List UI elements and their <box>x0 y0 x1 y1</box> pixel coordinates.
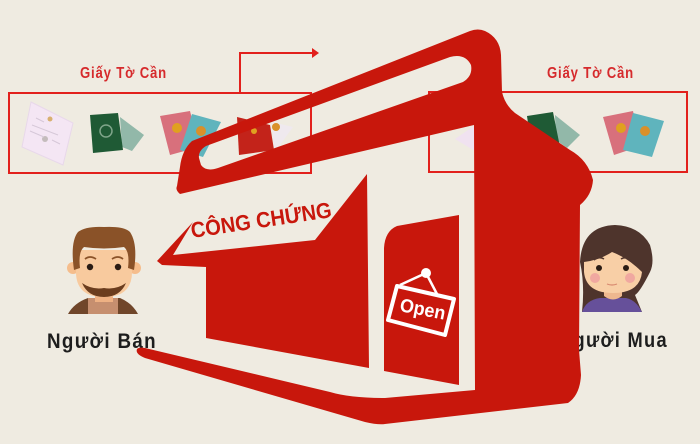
eyes <box>87 264 121 270</box>
neck <box>95 285 113 302</box>
document: red certificate and white card <box>237 117 293 155</box>
icon: open sign <box>388 268 454 335</box>
person: buyer avatar <box>580 225 652 312</box>
shop: door <box>384 215 459 385</box>
eyes <box>596 265 629 271</box>
document: household books <box>160 111 221 157</box>
shop: basket-shaped frame <box>137 30 593 424</box>
document: household books <box>603 111 664 157</box>
ears <box>67 262 141 274</box>
icon: open sign: Open <box>398 295 447 325</box>
eyebrows <box>594 258 632 260</box>
eyebrows <box>85 257 123 259</box>
person: seller avatar <box>67 227 141 314</box>
label: buyer: Người Mua <box>559 329 668 352</box>
shoulders <box>582 298 642 312</box>
cheeks <box>590 273 635 283</box>
heading: right documents: Giấy Tờ Cần <box>547 65 634 82</box>
panel: buyer documents <box>429 92 687 172</box>
beard <box>82 283 126 297</box>
document: certificate <box>455 126 500 160</box>
document: passport and card <box>90 113 144 153</box>
panel: seller documents <box>9 93 311 173</box>
heading: left documents: Giấy Tờ Cần <box>80 65 167 82</box>
shop: awning and front wall <box>157 174 369 368</box>
document: certificate <box>22 102 73 165</box>
hair <box>73 227 135 270</box>
sign: shop name: CÔNG CHỨNG <box>189 197 333 243</box>
document: passport and card <box>527 112 580 152</box>
shoulders <box>68 298 138 314</box>
face <box>76 250 132 297</box>
neck <box>604 285 622 300</box>
mouth <box>607 284 617 285</box>
face <box>584 252 642 293</box>
arrow: documents flow <box>240 48 319 93</box>
label: seller: Người Bán <box>47 330 157 353</box>
hair back <box>580 225 652 312</box>
